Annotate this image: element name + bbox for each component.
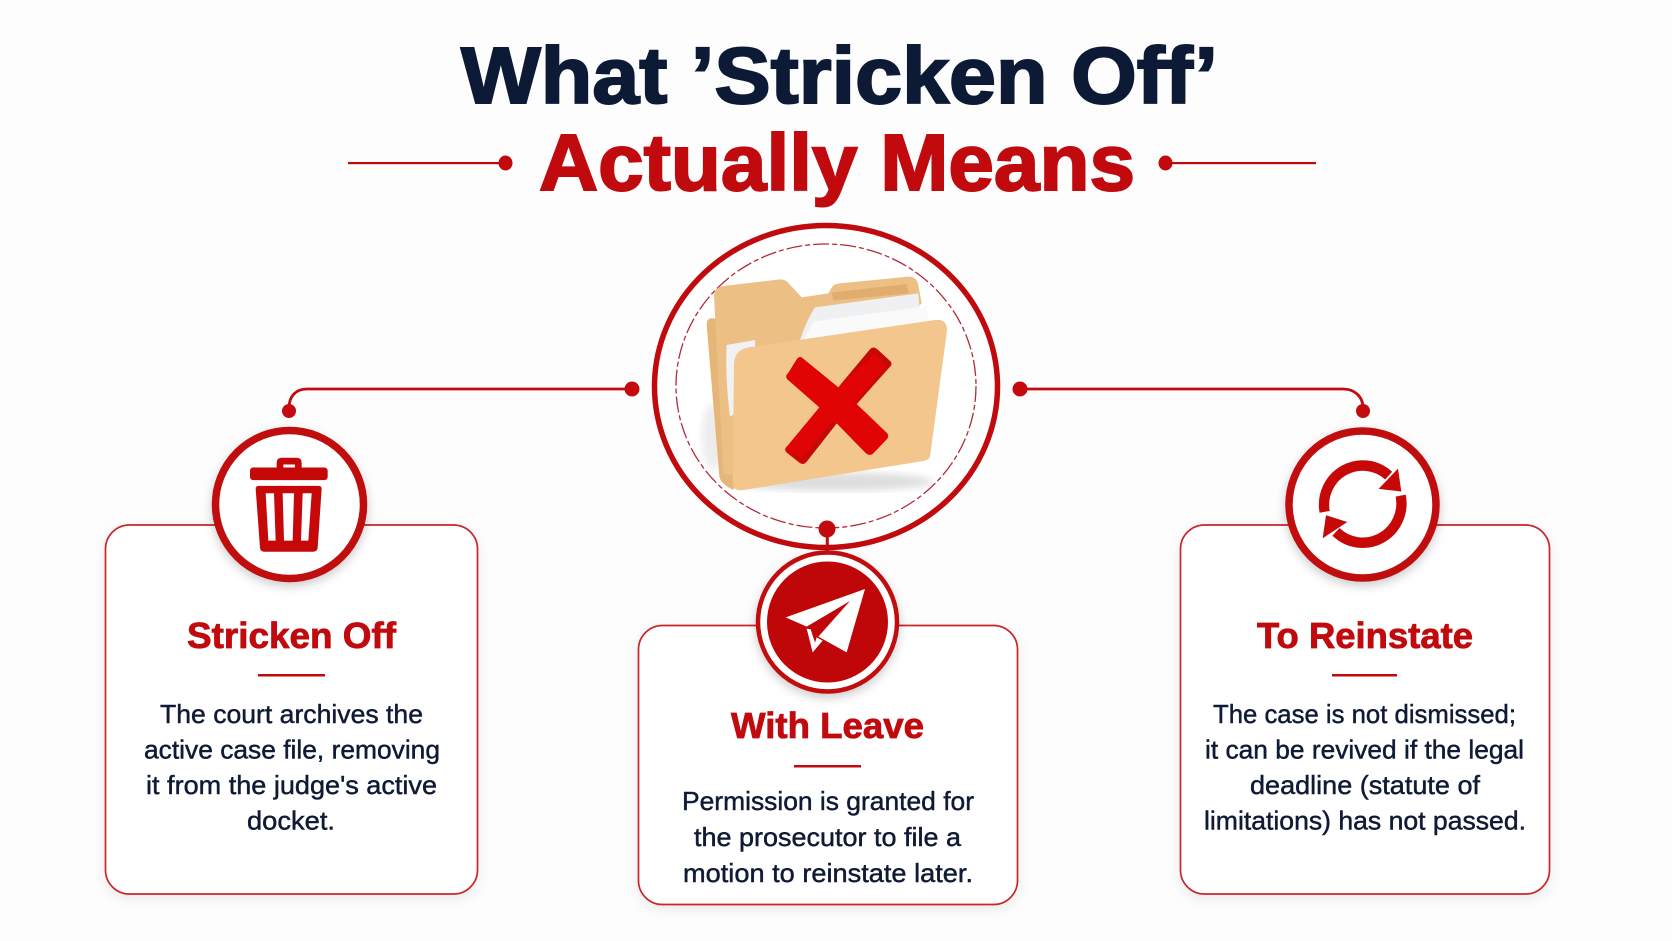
heading: With Leave xyxy=(731,705,924,746)
dashed inner ellipse xyxy=(676,244,976,528)
icon: paper plane xyxy=(758,552,897,692)
body text: the prosecutor to file a xyxy=(694,822,962,852)
title decoration: left line and dot xyxy=(348,156,512,170)
body text: motion to reinstate later. xyxy=(683,858,973,888)
heading: Stricken Off xyxy=(187,615,397,656)
connector: centre to left circle xyxy=(282,382,640,418)
body text: deadline (statute of xyxy=(1250,770,1481,800)
body text xyxy=(1204,699,1526,836)
body text: Permission is granted for xyxy=(682,786,974,816)
panel: to reinstate xyxy=(1180,431,1550,894)
card outline xyxy=(106,525,478,894)
divider xyxy=(794,765,861,768)
panel: with leave xyxy=(638,626,1018,904)
divider xyxy=(258,674,325,676)
body text: limitations) has not passed. xyxy=(1204,806,1526,836)
outer ellipse xyxy=(654,226,998,548)
body text: it from the judge's active xyxy=(146,770,437,800)
icon: trash can xyxy=(216,430,364,578)
body text: The court archives the xyxy=(160,699,423,729)
card outline xyxy=(1180,525,1550,894)
title xyxy=(461,31,1218,207)
central emblem: folder with red X xyxy=(654,226,998,548)
body text xyxy=(144,699,440,836)
body text: docket. xyxy=(247,806,335,836)
title line 2: Actually Means xyxy=(539,118,1135,207)
connector: centre to right circle xyxy=(1012,382,1370,418)
card outline xyxy=(638,626,1018,904)
title line 1: What ’Stricken Off’ xyxy=(461,31,1218,120)
folder back xyxy=(707,318,740,490)
connector: centre to with-leave circle xyxy=(818,520,836,554)
title decoration: right line and dot xyxy=(1158,156,1316,170)
icon: refresh arrows xyxy=(1289,431,1436,578)
body text: The case is not dismissed; xyxy=(1213,699,1516,729)
panel: stricken off xyxy=(106,430,478,894)
red X xyxy=(785,348,891,464)
body text: it can be revived if the legal xyxy=(1205,734,1524,764)
body text: active case file, removing xyxy=(144,734,440,764)
divider xyxy=(1332,674,1397,676)
body text xyxy=(682,786,974,888)
heading: To Reinstate xyxy=(1257,615,1473,656)
folder front xyxy=(733,320,947,490)
papers xyxy=(800,293,921,340)
icon: folder xyxy=(702,277,947,491)
